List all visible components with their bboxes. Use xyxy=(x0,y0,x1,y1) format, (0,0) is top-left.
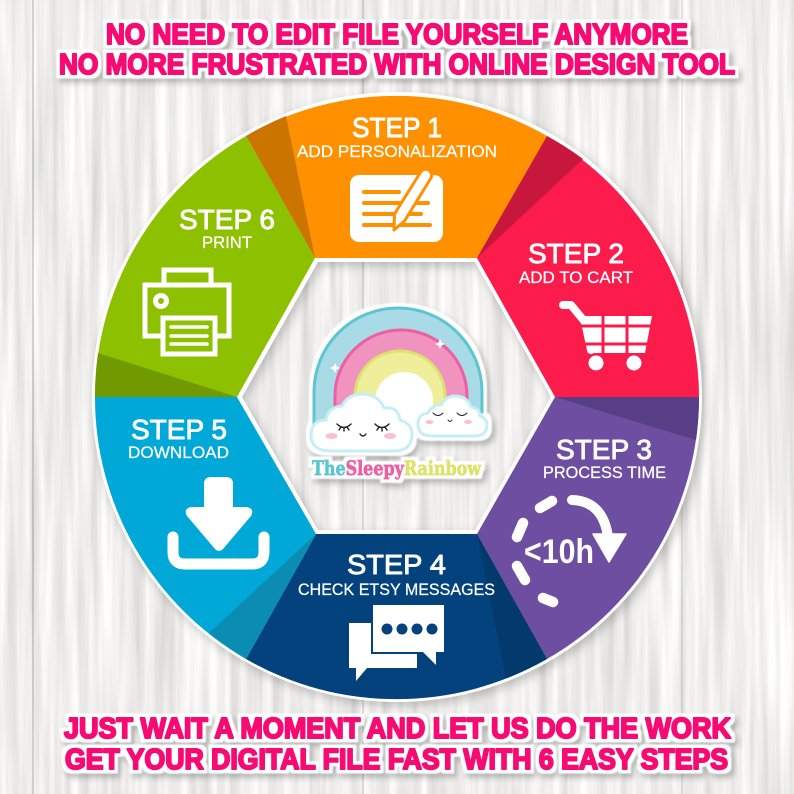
heading: top two lines: NO NEED TO EDIT FILE YOURSELF ANYMORE xyxy=(106,19,688,51)
icon: shopping cart xyxy=(563,305,652,370)
icon: download arrow xyxy=(173,477,264,564)
icon: printer xyxy=(145,270,229,354)
panel: step 1 orange: STEP 1 xyxy=(352,112,442,143)
sparkles xyxy=(330,339,445,373)
icon: timer under 10 hours: <10h xyxy=(524,533,594,571)
panel: step 5 blue xyxy=(95,397,316,659)
rainbow sticker xyxy=(311,308,487,451)
panel: step 3 purple xyxy=(477,397,699,659)
icon: note and pencil xyxy=(350,169,443,242)
panel: step 5 blue: DOWNLOAD xyxy=(128,443,229,462)
panel: step 6 green: PRINT xyxy=(202,233,252,252)
wheel of six steps xyxy=(95,96,699,699)
footer heading: bottom two lines xyxy=(64,713,731,776)
footer heading: bottom two lines: GET YOUR DIGITAL FILE FAST WITH 6 EASY STEPS xyxy=(65,744,728,776)
panel: step 2 red xyxy=(477,136,699,397)
panel: step 4 navy: STEP 4 xyxy=(347,549,446,580)
icon: timer under 10 hours xyxy=(517,500,626,602)
panel: step 2 red: ADD TO CART xyxy=(519,268,633,287)
white ring behind the wheel xyxy=(92,92,702,702)
panel: step 6 green: STEP 6 xyxy=(179,204,275,235)
icon: chat bubbles xyxy=(349,605,444,681)
panel: step 4 navy: CHECK ETSY MESSAGES xyxy=(298,580,495,599)
panel: step 6 green xyxy=(95,136,315,397)
panel: step 3 purple: PROCESS TIME xyxy=(543,463,666,482)
sleeping cloud faces xyxy=(326,413,472,439)
footer heading: bottom two lines: JUST WAIT A MOMENT AND LET US DO THE WORK xyxy=(64,713,731,745)
panel: step 5 blue: STEP 5 xyxy=(131,414,227,445)
panel: step 4 navy xyxy=(246,534,547,699)
panel: step 3 purple: STEP 3 xyxy=(556,434,652,465)
heading: top two lines: NO MORE FRUSTRATED WITH ONLINE DESIGN TOOL xyxy=(59,49,735,81)
panel: step 2 red: STEP 2 xyxy=(528,238,624,269)
panel: step 1 orange: ADD PERSONALIZATION xyxy=(297,142,497,161)
heading: top two lines xyxy=(59,19,735,81)
logo wordmark: TheSleepyRainbow xyxy=(312,456,482,480)
logo: The Sleepy Rainbow xyxy=(311,308,487,480)
panel: step 1 orange xyxy=(246,96,547,258)
